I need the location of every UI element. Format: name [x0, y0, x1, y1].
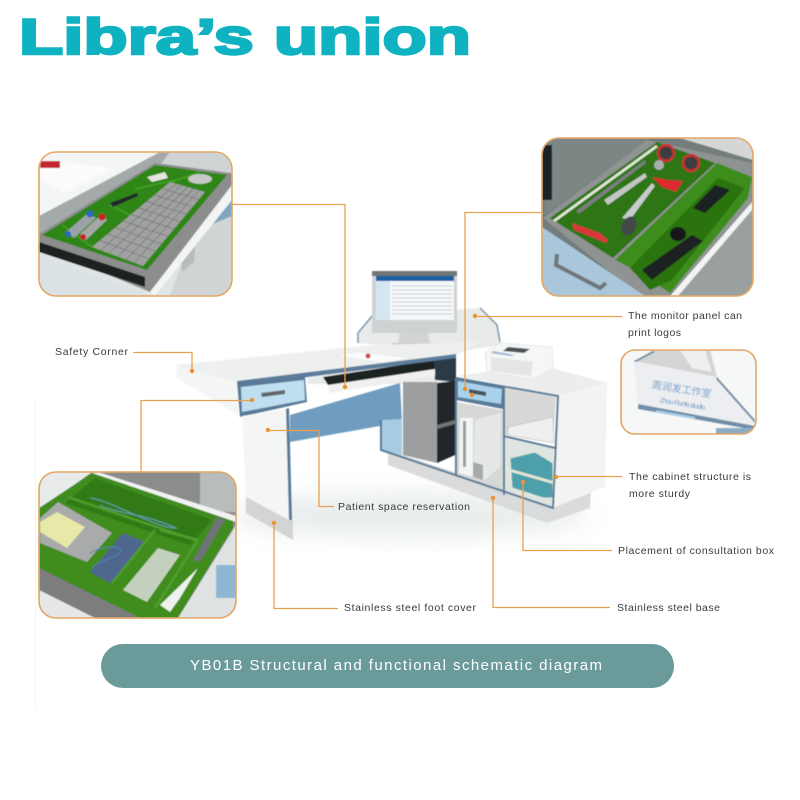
- monitor: [372, 271, 457, 348]
- label: patient space: Patient space reservation: [338, 501, 470, 513]
- floor shadow: [230, 493, 590, 537]
- callout: blood pressure drawer photo: [39, 472, 236, 618]
- caption pill: YB01B Structural and functional schematic diagram: [190, 657, 602, 674]
- lower compartment: [505, 438, 554, 507]
- label: stainless base: [491, 496, 720, 614]
- left cabinet side panel: [381, 419, 402, 455]
- modesty panel: [290, 383, 402, 442]
- label: cabinet structure: more sturdy: [629, 488, 691, 500]
- label: monitor panel: The monitor panel can: [628, 310, 742, 322]
- consultation box: [510, 452, 553, 498]
- label: foot cover: Stainless steel foot cover: [344, 602, 476, 614]
- callout: printed logo panel photo: 周润发工作室: [651, 378, 712, 400]
- keyboard: [92, 182, 205, 266]
- printer: [485, 343, 553, 379]
- label: safety corner: [55, 346, 194, 373]
- label: patient space: [266, 428, 470, 513]
- stacked paper: [508, 417, 554, 443]
- caption pill: [101, 644, 674, 688]
- desk left end: [176, 365, 238, 415]
- cabinet open shelf: [455, 402, 503, 495]
- label: cabinet structure: The cabinet structure is: [629, 471, 751, 483]
- upper compartment: [505, 388, 556, 443]
- base plinth: [388, 450, 591, 523]
- monitor back panel: [358, 308, 500, 352]
- label: stainless base: Stainless steel base: [617, 602, 720, 614]
- computer case: [403, 381, 455, 463]
- label: foot cover: [272, 521, 476, 614]
- desk illustration: [176, 271, 607, 540]
- label: consultation box: Placement of consultation box: [618, 545, 775, 557]
- markers: [66, 213, 96, 238]
- binders: [459, 413, 501, 480]
- callout: printed logo panel photo: [621, 350, 756, 434]
- desk top: [176, 342, 480, 383]
- cabinet frame: [381, 378, 558, 508]
- cabinet top: [457, 368, 607, 396]
- leader line: instruments drawer: [463, 212, 542, 397]
- under-desk opening: [308, 355, 456, 384]
- desk top front edge: [237, 354, 456, 386]
- left drawer: [237, 377, 307, 417]
- right drawer: [456, 378, 504, 409]
- label: monitor panel: [473, 310, 742, 339]
- cabinet end panel: [553, 383, 607, 508]
- label: cabinet structure: [554, 471, 751, 500]
- label: consultation box: [521, 480, 775, 557]
- paper on desk: [335, 352, 410, 363]
- strap, plug and otoscope: [693, 185, 730, 213]
- keyboard tray: [328, 369, 435, 393]
- callout: keyboard drawer photo: [39, 152, 232, 296]
- left leg: [242, 408, 293, 540]
- label: safety corner: Safety Corner: [55, 346, 128, 358]
- leader line: drawer: [141, 398, 254, 472]
- callout: instrument drawer photo: [542, 138, 753, 296]
- title: Libra’s union: [19, 9, 471, 65]
- callout: printed logo panel photo: Zhou Runfa studio: [659, 397, 706, 412]
- label: monitor panel: print logos: [628, 327, 681, 339]
- leader line: keyboard tray: [232, 204, 347, 389]
